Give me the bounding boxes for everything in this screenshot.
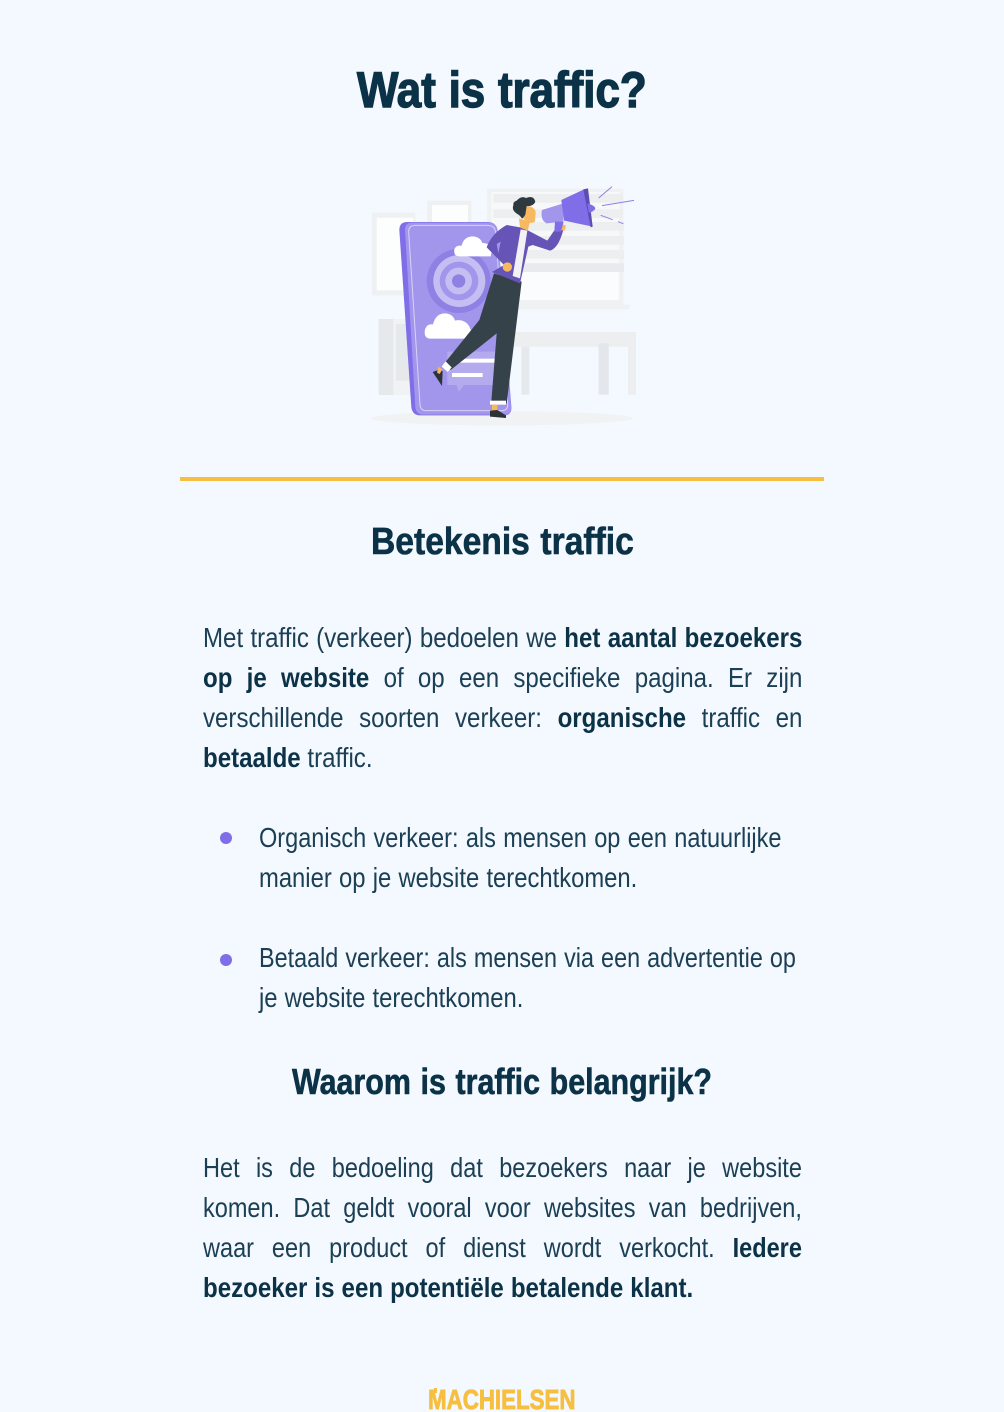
- text block: why traffic matters: [203, 1152, 802, 1303]
- bullet item: organisch verkeer: Organisch verkeer: als mensen op een natuurlijke: [259, 822, 781, 853]
- illustration: man with megaphone and phone: [372, 186, 636, 426]
- bullet list: [220, 822, 796, 1013]
- bullet item: betaald verkeer: je website terechtkomen.: [259, 982, 523, 1013]
- text block: why traffic matters: komen. Dat geldt vooral voor websites van bedrijven,: [203, 1192, 802, 1223]
- text block: why traffic matters: waar een product of dienst wordt verkocht. Iedere: [203, 1232, 802, 1263]
- bullet item: organisch verkeer: manier op je website terechtkomen.: [259, 862, 637, 893]
- bullet item: organisch verkeer: [220, 822, 781, 893]
- background: office windows and desk: [371, 189, 636, 425]
- text block: intro paragraph: betaalde traffic.: [203, 742, 373, 773]
- man: [433, 197, 566, 418]
- bullet item: betaald verkeer: Betaald verkeer: als mensen via een advertentie op: [259, 942, 796, 973]
- text block: intro paragraph: [203, 622, 802, 773]
- text block: intro paragraph: op je website of op een specifieke pagina. Er zijn: [203, 662, 802, 693]
- megaphone: [542, 187, 634, 232]
- heading: Betekenis traffic: Betekenis traffic: [371, 521, 634, 563]
- text block: intro paragraph: Met traffic (verkeer) bedoelen we het aantal bezoekers: [203, 622, 802, 653]
- title: Wat is traffic?: [357, 62, 647, 118]
- heading: Waarom is traffic belangrijk?: Waarom is traffic belangrijk?: [292, 1061, 712, 1102]
- bullet item: betaald verkeer: [220, 942, 796, 1013]
- text block: why traffic matters: bezoeker is een potentiële betalende klant.: [203, 1272, 693, 1303]
- phone: [399, 222, 511, 415]
- text block: why traffic matters: Het is de bedoeling dat bezoekers naar je website: [203, 1152, 802, 1183]
- text block: intro paragraph: verschillende soorten verkeer: organische traffic en: [203, 702, 802, 733]
- divider line: [180, 477, 824, 481]
